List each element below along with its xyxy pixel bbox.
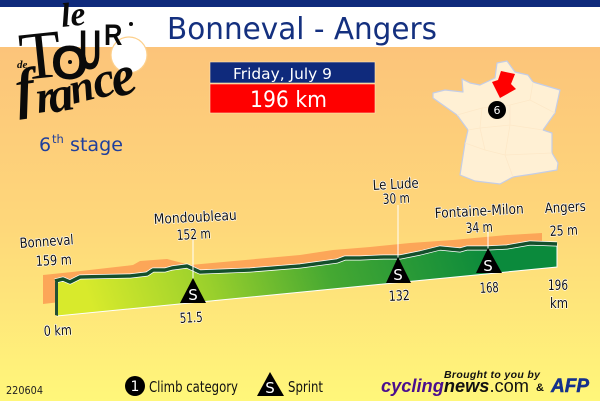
label: Le Lude altitude: 30 m xyxy=(382,191,410,208)
stage number: stage xyxy=(70,134,123,156)
background relief xyxy=(43,233,542,304)
profile top highlight xyxy=(55,243,557,282)
sprint marker 132: S xyxy=(393,266,403,284)
logo: le Tour de France xyxy=(11,0,147,124)
stage location arrow xyxy=(492,71,516,98)
logo sun circle xyxy=(111,37,147,73)
logo: le Tour de France: e xyxy=(101,44,144,110)
legend: climb category xyxy=(125,376,238,396)
logo: le Tour de France: a xyxy=(43,64,78,124)
credit: cyclingnews logo: cyclingnews.com xyxy=(381,376,529,396)
profile terrain xyxy=(57,243,557,316)
profile left side xyxy=(55,282,58,316)
label: Fontaine-Milon: Fontaine-Milon xyxy=(434,201,524,222)
distance box: 196 km xyxy=(250,88,327,113)
logo: le Tour de France: f xyxy=(11,56,44,121)
label: 132: 132 xyxy=(388,288,410,305)
profile dark edge xyxy=(55,243,557,282)
sprint marker 132 xyxy=(386,257,411,284)
logo: le Tour de France: R xyxy=(104,18,122,51)
label: 196 km: km xyxy=(550,296,568,312)
region borders xyxy=(457,82,555,177)
label: 168: 168 xyxy=(479,280,499,297)
label: Mondoubleau altitude: 152 m xyxy=(176,226,211,244)
sprint marker 168: S xyxy=(483,257,493,275)
top bar xyxy=(0,0,600,7)
label: Angers: Angers xyxy=(544,199,586,217)
label: Bonneval: Bonneval xyxy=(19,232,74,252)
logo: le Tour de France: c xyxy=(85,50,121,110)
logo: le Tour de France: r xyxy=(32,70,58,123)
distance box xyxy=(210,84,375,113)
legend: sprint xyxy=(257,372,323,397)
reference code: 220604 xyxy=(6,384,43,397)
logo: le Tour de France: U xyxy=(79,18,101,81)
label: 51.5: 51.5 xyxy=(179,310,203,327)
logo: le Tour de France: de xyxy=(17,59,28,71)
logo: le Tour de France: O xyxy=(51,37,88,90)
logo: le Tour de France: T xyxy=(16,15,65,95)
map of France xyxy=(433,61,560,184)
marker line: Le Lude xyxy=(397,205,399,258)
legend: climb category: Climb category xyxy=(149,378,238,396)
sprint marker 51.5 xyxy=(180,278,206,304)
marker line: Mondoubleau xyxy=(192,239,194,279)
label: 196 km: 196 xyxy=(548,278,568,294)
legend: sprint: S xyxy=(265,379,275,397)
France outline xyxy=(433,61,560,184)
label: Le Lude: Le Lude xyxy=(372,176,419,194)
date box: Friday, July 9 xyxy=(233,65,332,83)
logo: le Tour de France: n xyxy=(64,60,99,114)
stage profile xyxy=(43,233,557,316)
stage number: th xyxy=(52,132,64,146)
credit: brought to you by: Brought to you by xyxy=(444,369,541,381)
label: Angers altitude: 25 m xyxy=(549,223,578,240)
label: 0 km: 0 km xyxy=(43,323,72,340)
title: Bonneval - Angers xyxy=(167,12,437,47)
date box xyxy=(210,62,375,83)
credit: ampersand: & xyxy=(536,382,544,394)
label: Bonneval altitude: 159 m xyxy=(35,252,72,270)
stage number: 6 xyxy=(39,134,51,156)
sprint marker 168 xyxy=(476,248,502,275)
credit: AFP logo: AFP xyxy=(550,376,589,397)
sprint marker 51.5: S xyxy=(188,286,198,304)
legend: climb category: 1 xyxy=(131,379,139,395)
marker line: Fontaine-Milon xyxy=(487,232,489,249)
legend: sprint: Sprint xyxy=(288,378,323,396)
label: Fontaine-Milon altitude: 34 m xyxy=(465,220,493,237)
stage marker: 6 xyxy=(494,104,500,117)
label: Mondoubleau: Mondoubleau xyxy=(153,208,237,228)
